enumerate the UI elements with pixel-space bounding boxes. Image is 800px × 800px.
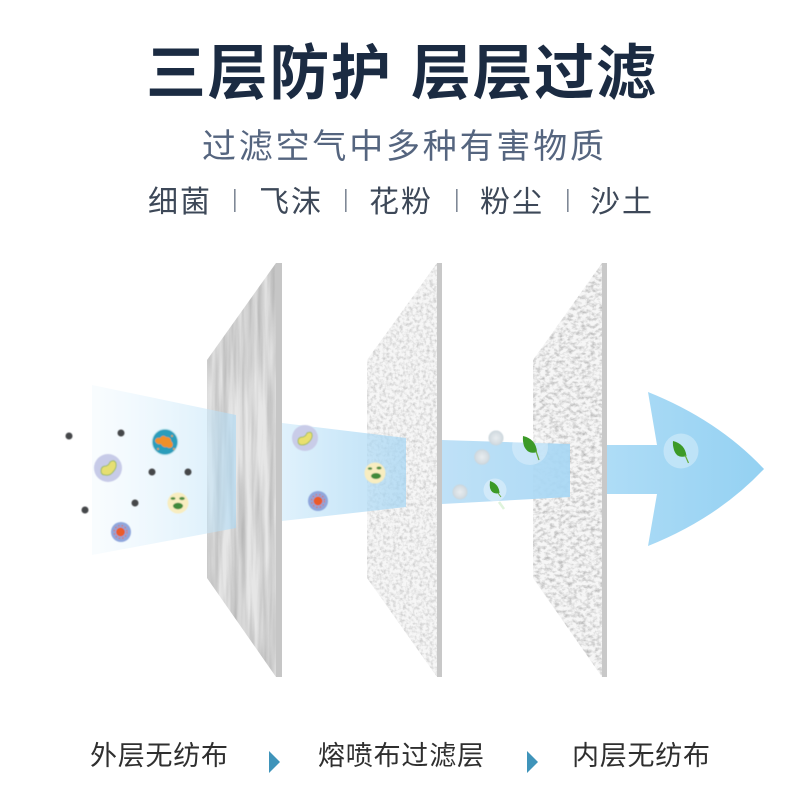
arrow: step one: [269, 751, 280, 773]
icon: red virus: [111, 522, 131, 542]
icon: yellow pollen cell: [168, 492, 188, 514]
label: inner non-woven: 内层无纺布: [572, 741, 710, 771]
panel: melt-blown filter layer: [367, 263, 442, 677]
arrow: step two: [527, 751, 538, 773]
subtitle: 过滤空气中多种有害物质: [202, 128, 604, 166]
air beam: unfiltered: [92, 385, 236, 555]
dust particles: [66, 430, 192, 514]
category list: [148, 186, 652, 219]
icon: lavender bacteria: [94, 454, 122, 482]
category: sand: 沙土: [590, 186, 652, 219]
icon: red virus, second stage: [308, 491, 328, 511]
droplets: [452, 430, 504, 500]
arrow: clean air output: [607, 392, 764, 546]
icon: leaf on arrow: [664, 434, 698, 468]
icon: large leaf in halo: [512, 429, 548, 465]
category: pollen: 花粉: [369, 186, 431, 219]
air beam: after first layer: [282, 423, 406, 521]
icon: yellow pollen cell, second stage: [364, 462, 386, 484]
label: outer non-woven: 外层无纺布: [90, 741, 228, 771]
icon: small leaf in halo: [484, 478, 506, 509]
category: dust: 粉尘: [480, 186, 542, 219]
air beam: after second layer: [442, 440, 570, 504]
label: melt-blown filter: 熔喷布过滤层: [318, 741, 484, 771]
icon: lavender bacteria, second stage: [292, 425, 318, 451]
category: bacteria: 细菌: [148, 186, 210, 219]
title: 三层防护 层层过滤: [146, 40, 656, 107]
panel: inner non-woven layer: [533, 263, 607, 677]
category: droplets: 飞沫: [259, 186, 321, 219]
panel: outer non-woven layer: [207, 263, 282, 677]
icon: teal bacteria: [152, 429, 178, 455]
